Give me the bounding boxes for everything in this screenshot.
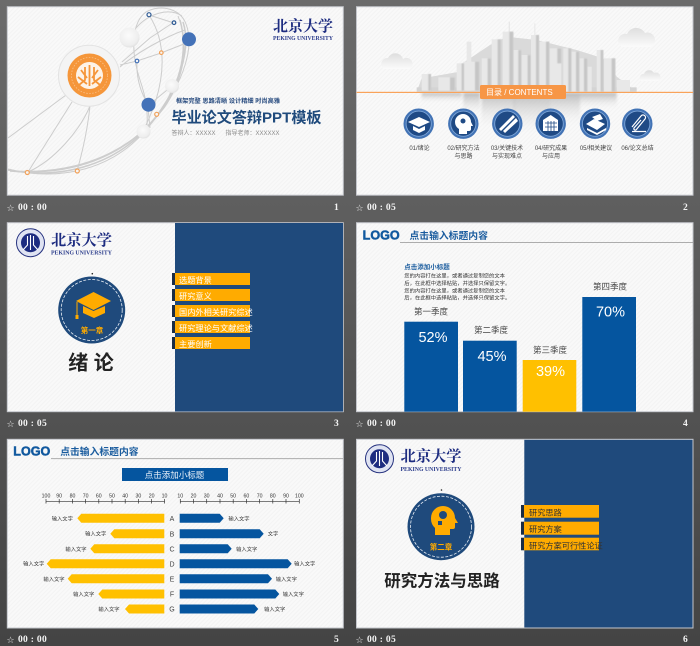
slide heading: 点击输入标题内容 xyxy=(410,229,488,242)
left axis: 40 xyxy=(122,494,128,500)
seal: orange emblem xyxy=(58,45,120,106)
left axis: 70 xyxy=(83,494,89,500)
right axis: 50 xyxy=(230,494,236,500)
icon 01: graduation cap xyxy=(404,108,434,139)
slide 1: title slide xyxy=(7,7,343,195)
slide 4: bar chart slide xyxy=(356,223,693,412)
left axis: 10 xyxy=(162,494,167,500)
outline list: 研究思路 xyxy=(529,508,562,518)
slide 5 footer xyxy=(6,635,339,646)
right bar labels: 输入文字 xyxy=(228,514,250,522)
university seal xyxy=(366,445,394,473)
right blue bars xyxy=(180,514,292,614)
right axis: 60 xyxy=(244,494,249,500)
body text: 后，在此框中选择粘贴，并选择只保留文字。 xyxy=(404,294,510,302)
network graphic with seal xyxy=(8,8,196,174)
outline list: 研究方案 xyxy=(529,524,562,534)
right axis: 30 xyxy=(204,494,210,500)
right axis: 10 xyxy=(177,494,183,500)
slide 2 footer: 00 : 05 xyxy=(367,203,396,213)
Peking University logo: PEKING UNIVERSITY xyxy=(51,250,113,256)
Peking University logo: 北京大学 xyxy=(51,229,112,250)
category letters: C xyxy=(169,546,175,553)
logo placeholder: LOGO xyxy=(13,444,51,458)
slide 4 footer: ☆ xyxy=(356,420,364,430)
slide 6 footer: 00 : 05 xyxy=(367,635,396,645)
slide 6: chapter two xyxy=(356,439,693,628)
contents labels: 与应用 xyxy=(542,152,560,160)
heading rule xyxy=(400,241,693,244)
navy panel xyxy=(524,440,692,628)
left axis: 20 xyxy=(149,494,155,500)
contents labels: 03/关键技术 xyxy=(491,144,523,152)
category letters xyxy=(169,516,175,614)
sub heading: 点击添加小标题 xyxy=(404,262,450,271)
tagline: 框架完整 思路清晰 设计精细 时尚高雅 xyxy=(176,97,280,105)
left axis: 90 xyxy=(56,494,62,500)
slide 2: contents xyxy=(356,7,693,195)
slide 3 footer xyxy=(6,419,339,430)
body text: 您的内容打在这里，或者通过复制您的文本 xyxy=(404,272,506,280)
slide 1 footer: 00 : 00 xyxy=(18,203,47,213)
slide 3 footer: ☆ xyxy=(6,420,15,430)
icon 03: tools xyxy=(492,108,522,139)
slide 6 footer xyxy=(356,635,688,646)
category letters: A xyxy=(170,516,175,523)
Peking University logo: PEKING UNIVERSITY xyxy=(273,36,334,42)
left bar labels: 输入文字 xyxy=(85,530,106,538)
slide 2 footer: ☆ xyxy=(356,204,364,214)
slide 4 footer: 00 : 00 xyxy=(367,419,396,429)
outline list: 选题背景 xyxy=(179,275,212,285)
quarterly bar chart: 52% xyxy=(418,330,448,346)
white nodes xyxy=(120,28,179,138)
right bar labels: 输入文字 xyxy=(294,560,315,568)
outline list: 研究方案可行性论证 xyxy=(529,540,603,550)
chapter badge xyxy=(58,273,125,344)
cloud right top xyxy=(618,28,655,47)
chapter badge: 第二章 xyxy=(430,542,453,552)
right bar labels: 输入文字 xyxy=(236,545,257,553)
left bar labels: 输入文字 xyxy=(98,605,120,613)
contents labels: 02/研究方法 xyxy=(447,144,480,152)
left bar labels: 输入文字 xyxy=(52,514,73,522)
slide 5 footer: 00 : 00 xyxy=(18,635,47,645)
category letters: B xyxy=(170,531,175,538)
right axis: 100 xyxy=(295,494,304,500)
outline list xyxy=(172,273,253,349)
body text: 您的内容打在这里，或者通过复制您的文本 xyxy=(404,286,506,294)
chapter badge xyxy=(408,489,474,560)
slide 2 footer: 2 xyxy=(683,203,688,213)
category letters: F xyxy=(170,592,174,599)
contents labels: 与实现难点 xyxy=(492,152,522,160)
slide 6 footer: 6 xyxy=(683,635,688,645)
category letters: E xyxy=(170,576,175,583)
contents banner: 目录 / CONTENTS xyxy=(486,88,553,97)
icon 02: head xyxy=(448,108,478,139)
icon 05: books xyxy=(580,108,610,139)
sub heading box: 点击添加小标题 xyxy=(145,470,205,480)
navy panel xyxy=(175,223,343,412)
quarterly bar chart: 第一季度 xyxy=(414,306,448,316)
left bar labels: 输入文字 xyxy=(65,545,87,553)
left axis: 30 xyxy=(136,494,141,500)
slide 2 footer xyxy=(356,203,688,214)
right bar labels: 输入文字 xyxy=(276,575,297,583)
quarterly bar chart: 第三季度 xyxy=(533,345,567,355)
university seal xyxy=(16,229,44,257)
slide 3: chapter one xyxy=(7,223,343,412)
left bar labels: 输入文字 xyxy=(43,575,65,583)
outline list: 国内外相关研究综述 xyxy=(179,307,253,317)
cloud right small xyxy=(640,70,660,81)
main title: 毕业论文答辩PPT模板 xyxy=(172,108,322,126)
quarterly bar chart: 70% xyxy=(596,304,625,320)
category letters: G xyxy=(169,607,175,614)
right bar labels: 文字 xyxy=(268,530,278,538)
right axis: 70 xyxy=(257,494,263,500)
contents labels: 04/研究成果 xyxy=(535,144,567,152)
slide 4 footer xyxy=(356,419,688,430)
left axis: 50 xyxy=(109,494,115,500)
right axis xyxy=(177,494,304,504)
presenter line: 答辩人：XXXXX xyxy=(172,129,216,137)
icon 04: building xyxy=(536,108,566,139)
slide 5 footer: ☆ xyxy=(6,636,15,646)
contents labels: 06/论文总结 xyxy=(621,144,654,152)
contents labels: 05/相关建议 xyxy=(580,144,612,152)
heading rule xyxy=(51,457,343,460)
left axis: 100 xyxy=(42,494,50,500)
left axis: 60 xyxy=(96,494,102,500)
blue nodes xyxy=(142,32,196,112)
chapter badge: 第一章 xyxy=(81,325,104,335)
quarterly bar chart xyxy=(404,282,636,412)
quarterly bar chart: 第四季度 xyxy=(593,282,627,292)
slide 3 footer: 3 xyxy=(334,419,339,429)
outline list xyxy=(521,505,603,550)
advisor line: 指导老师：XXXXXX xyxy=(226,129,280,137)
left axis: 80 xyxy=(70,494,75,500)
contents labels: 与思路 xyxy=(454,152,473,160)
small ring nodes xyxy=(25,13,176,175)
cloud left xyxy=(381,53,413,69)
slide 6 footer: ☆ xyxy=(356,636,364,646)
slide 5 footer: 5 xyxy=(334,635,339,645)
Peking University logo: 北京大学 xyxy=(400,445,462,466)
outline list: 主要创新 xyxy=(179,339,212,349)
right axis: 40 xyxy=(217,494,223,500)
slide 3 footer: 00 : 05 xyxy=(18,419,47,429)
slide 5: butterfly chart slide xyxy=(7,439,343,628)
left bar labels: 输入文字 xyxy=(73,590,94,598)
contents labels: 01/绪论 xyxy=(409,144,430,152)
left bar labels xyxy=(23,514,120,613)
logo placeholder: LOGO xyxy=(363,228,400,242)
chapter title: 研究方法与思路 xyxy=(384,570,500,590)
Peking University logo: 北京大学 xyxy=(273,15,333,36)
outline list: 研究理论与文献综述 xyxy=(179,323,253,333)
slide 1 footer xyxy=(6,203,339,214)
right axis: 20 xyxy=(191,494,196,500)
category letters: D xyxy=(169,561,175,568)
Peking University logo: PEKING UNIVERSITY xyxy=(400,467,462,473)
quarterly bar chart: 45% xyxy=(477,349,507,365)
contents labels xyxy=(409,144,654,160)
quarterly bar chart: 39% xyxy=(536,364,565,380)
icon 06: paperclip xyxy=(622,108,652,139)
slide 1 footer: ☆ xyxy=(6,204,15,214)
left yellow bars xyxy=(47,514,164,614)
left bar labels: 输入文字 xyxy=(23,560,44,568)
slide 4 footer: 4 xyxy=(683,419,688,429)
slide 1 footer: 1 xyxy=(334,203,339,213)
right bar labels: 输入文字 xyxy=(264,605,285,613)
quarterly bar chart: 第二季度 xyxy=(474,325,508,335)
outline list: 研究意义 xyxy=(179,291,212,301)
orange divider xyxy=(356,92,693,93)
right bar labels xyxy=(228,514,315,613)
slide heading: 点击输入标题内容 xyxy=(60,445,139,458)
right axis: 80 xyxy=(270,494,276,500)
body text: 后，在此框中选择粘贴，并选择只保留文字。 xyxy=(404,279,510,287)
chapter title: 绪 论 xyxy=(68,352,114,374)
body text xyxy=(404,272,510,302)
city skyline xyxy=(417,22,637,136)
contents banner xyxy=(480,85,566,99)
sub heading box xyxy=(122,468,228,481)
left axis xyxy=(42,494,167,504)
right axis: 90 xyxy=(283,494,289,500)
right bar labels: 输入文字 xyxy=(283,590,304,598)
